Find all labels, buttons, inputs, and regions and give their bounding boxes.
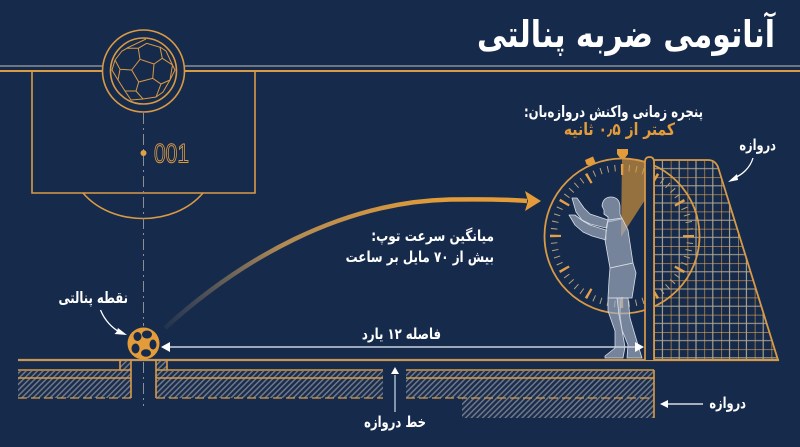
label: distance: فاصله ۱۲ یارد	[362, 327, 441, 343]
stopwatch major ticks	[556, 170, 688, 302]
stopwatch minor ticks	[554, 168, 690, 304]
arrow: ball trajectory	[165, 191, 541, 328]
arrow: goal top	[728, 158, 753, 182]
stopwatch	[544, 149, 700, 314]
icon: plan view football	[102, 30, 184, 112]
label: penalty spot: نقطه پنالتی	[59, 289, 128, 308]
arrow: to penalty spot	[100, 310, 127, 335]
label: goal section: دروازه	[709, 396, 746, 413]
label: goalkeeper reaction window: کمتر از ۰٫۵ ثانیه	[564, 120, 676, 139]
label: goalkeeper reaction window	[524, 103, 703, 139]
digital counter: 001	[154, 138, 189, 168]
penalty spot ball	[128, 328, 160, 360]
goalkeeper	[569, 197, 642, 358]
penalty box plan	[32, 71, 255, 406]
reaction wedge	[621, 158, 645, 237]
text: average ball speed	[346, 227, 494, 266]
label: goal line: خط دروازه	[364, 415, 426, 431]
arrow: distance	[161, 342, 644, 352]
penalty spot plan marker	[140, 150, 146, 156]
text: average ball speed: بیش از ۷۰ مایل بر ساعت	[346, 249, 494, 266]
hatch strips	[18, 361, 654, 418]
pitch top lines	[0, 66, 800, 71]
goalpost	[645, 157, 654, 360]
ground section	[18, 360, 779, 418]
goal net	[654, 160, 778, 360]
label: goalkeeper reaction window: پنجره زمانی واکنش دروازه‌بان:	[524, 103, 703, 122]
text: average ball speed: میانگین سرعت توپ:	[371, 227, 494, 245]
arrow: goal line	[391, 367, 399, 412]
title: آناتومی ضربه پنالتی	[477, 11, 776, 57]
arrow: goal section	[660, 400, 703, 408]
label: goal top: دروازه	[739, 138, 776, 155]
